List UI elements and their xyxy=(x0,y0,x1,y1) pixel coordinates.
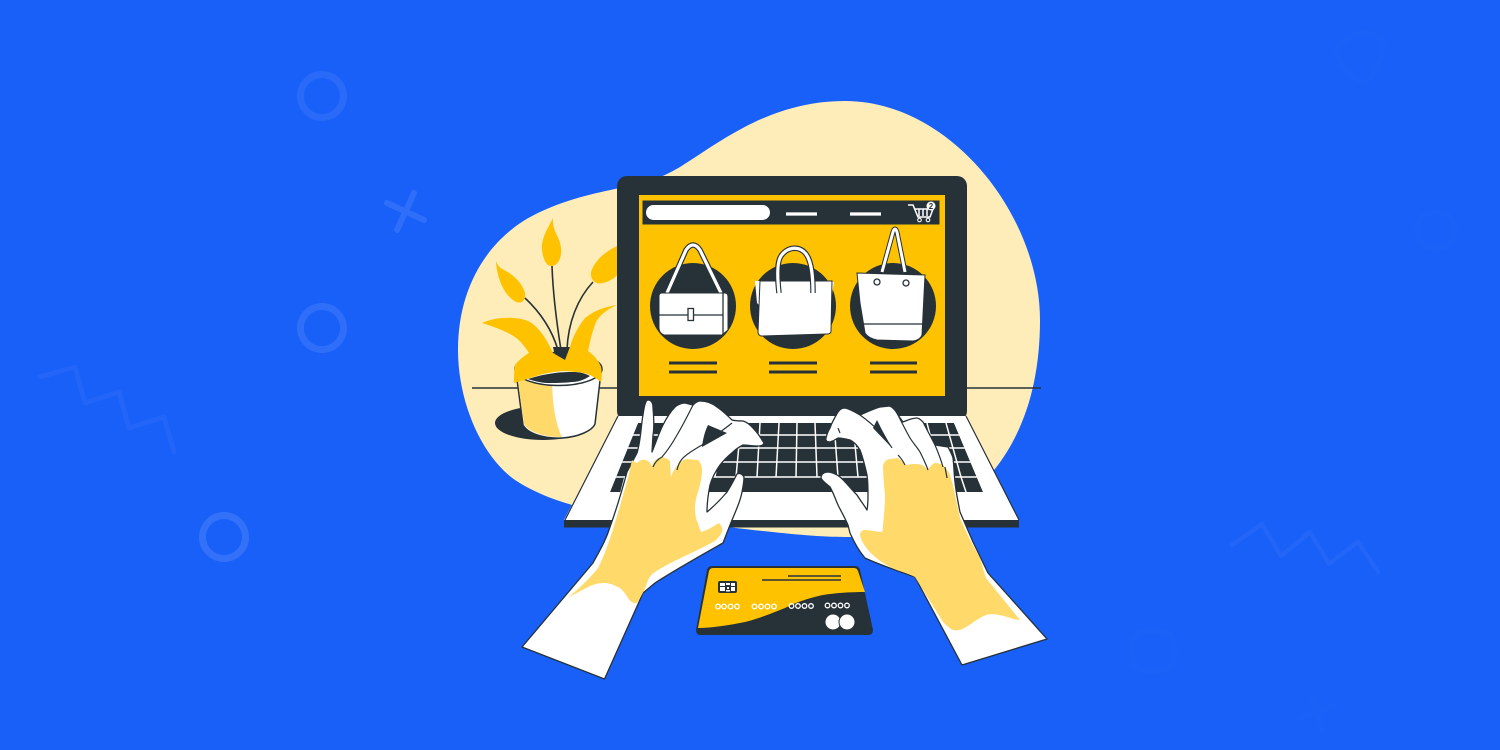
hand silhouette xyxy=(522,400,764,679)
soil xyxy=(528,372,590,383)
plant stems xyxy=(525,266,593,350)
yellow hand fill xyxy=(860,458,1020,630)
pot yellow shading xyxy=(517,375,562,437)
leaf: big pair xyxy=(482,305,617,383)
card number dots xyxy=(716,603,849,609)
cream blob xyxy=(458,101,1040,537)
leaf: right xyxy=(591,246,618,283)
navigation bar xyxy=(642,200,940,224)
product 3: shopper bag xyxy=(850,229,936,372)
cart icon xyxy=(908,202,936,222)
product 1: shoulder bag xyxy=(650,245,736,372)
leaf: top xyxy=(542,218,561,266)
card body xyxy=(696,566,873,635)
keyboard xyxy=(605,423,988,492)
finger lines xyxy=(838,415,947,478)
hand silhouette xyxy=(821,406,1047,665)
laptop base xyxy=(564,416,1019,528)
pot rim xyxy=(515,352,602,386)
search field xyxy=(646,205,770,220)
laptop screen display xyxy=(639,195,945,396)
card logo xyxy=(826,614,855,630)
yellow hand fill xyxy=(567,457,722,603)
finger lines xyxy=(653,405,732,470)
menu items xyxy=(786,212,881,216)
product 2: tote bag xyxy=(750,248,836,372)
laptop screen bezel xyxy=(617,176,967,421)
table line xyxy=(472,387,1041,389)
stem base xyxy=(553,347,570,361)
credit card xyxy=(696,566,873,635)
gap between index and middle finger xyxy=(873,420,892,448)
plant in pot xyxy=(482,218,618,440)
right hand xyxy=(821,406,1047,665)
left hand xyxy=(522,400,764,679)
gap between middle and index finger xyxy=(702,425,727,447)
card chip xyxy=(718,581,737,593)
pot shadow xyxy=(495,406,591,440)
card yellow area xyxy=(698,568,865,628)
leaf: left xyxy=(496,261,525,303)
cart icon: 2 xyxy=(929,202,934,211)
illustration canvas xyxy=(38,71,1380,680)
card signature lines xyxy=(762,576,841,580)
pot body xyxy=(516,372,601,438)
